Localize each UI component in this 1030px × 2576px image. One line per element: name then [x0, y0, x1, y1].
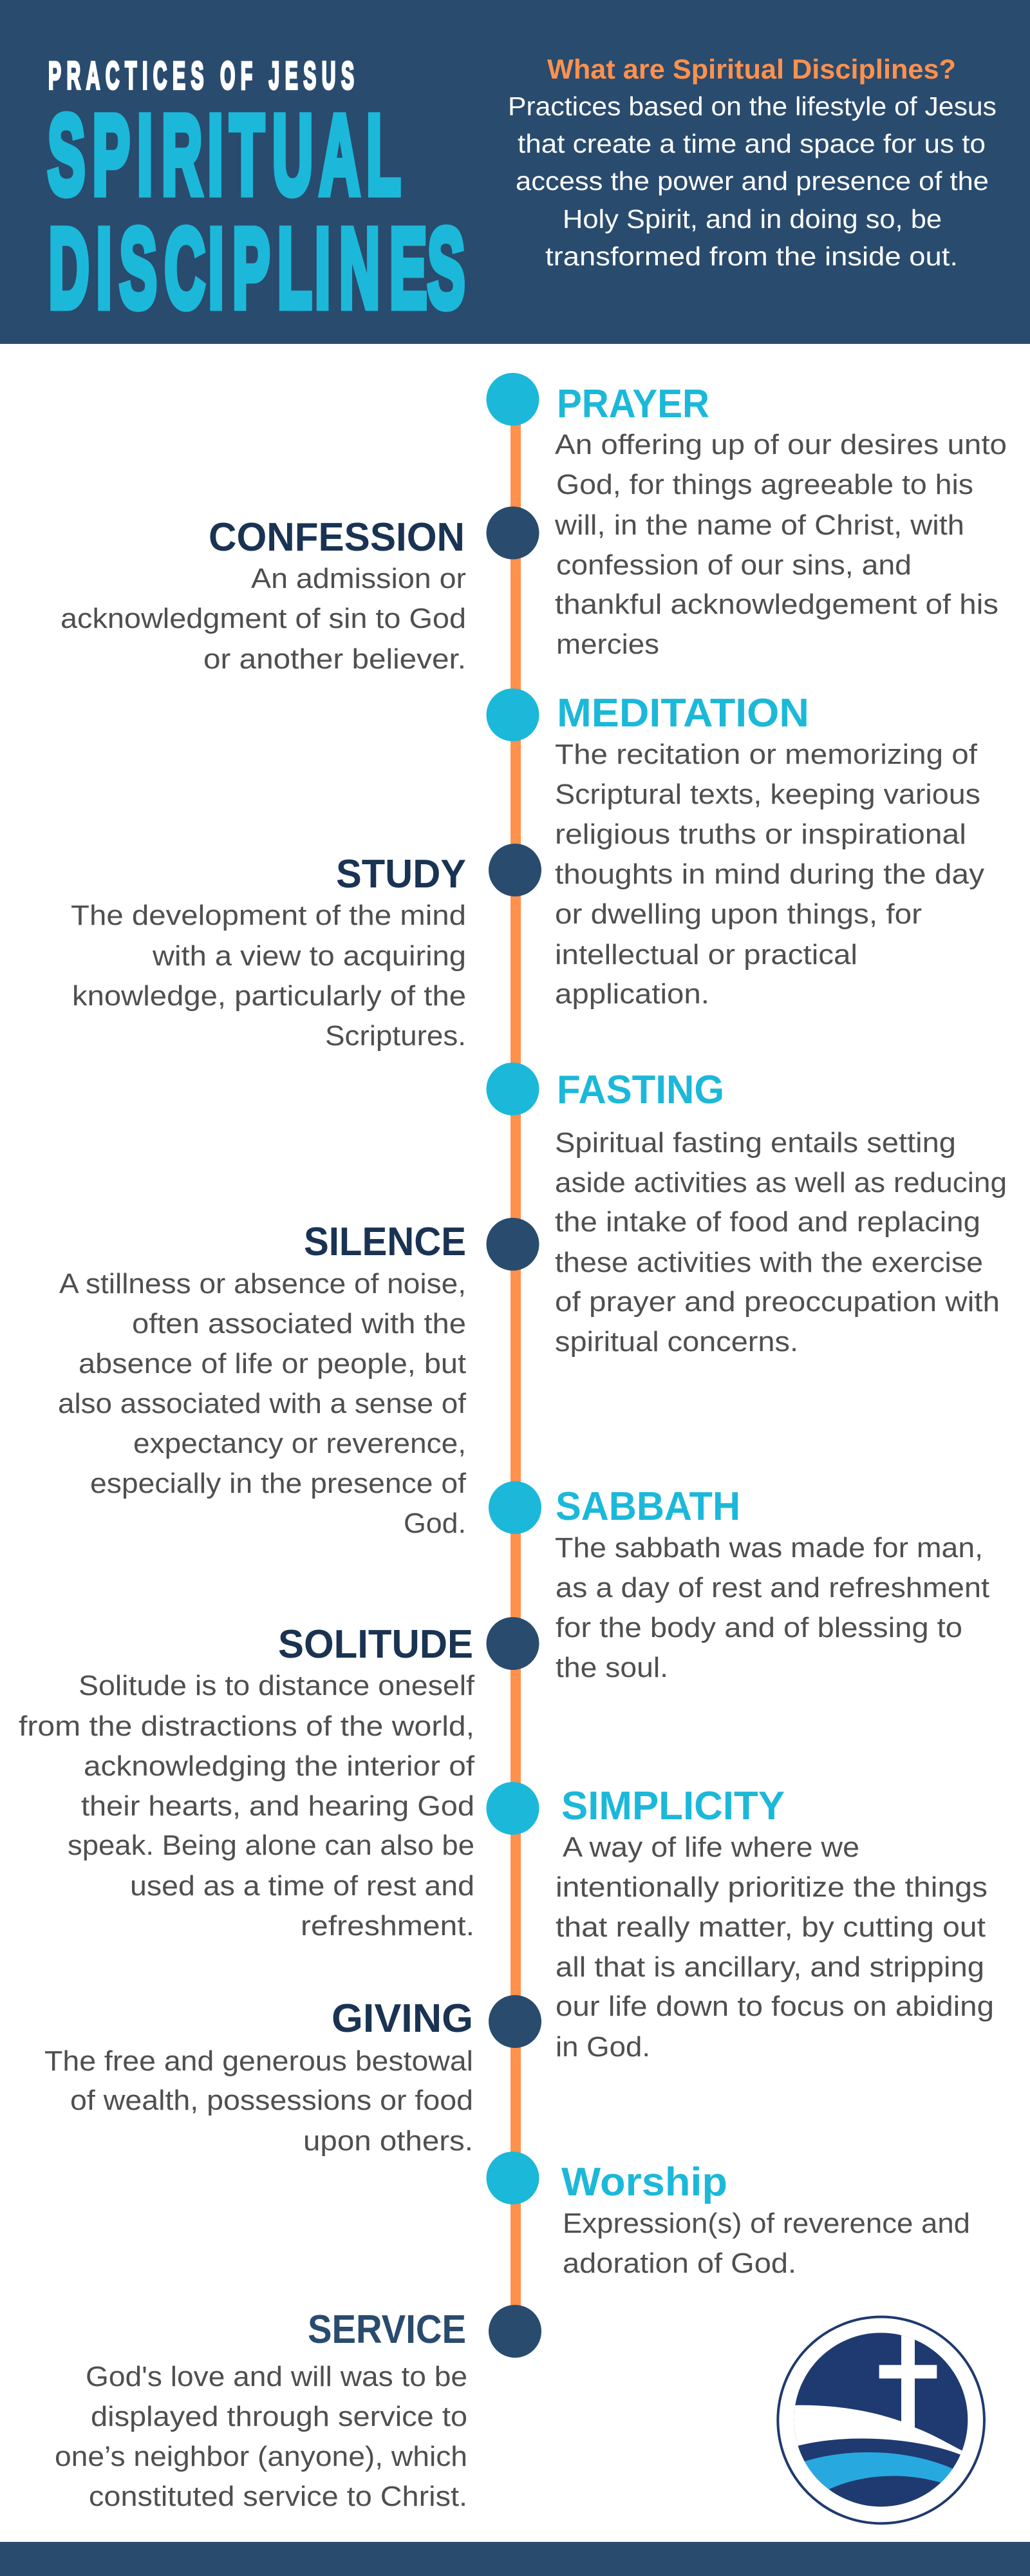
panel: solitude	[19, 1622, 475, 1942]
panel: silence	[58, 1220, 467, 1539]
panel: giving: of wealth, possessions or food	[70, 2085, 473, 2116]
panel: prayer: PRAYER	[557, 382, 709, 426]
panel: meditation: application.	[555, 978, 709, 1010]
panel: sabbath	[555, 1484, 989, 1683]
panel: giving: GIVING	[332, 1996, 473, 2041]
panel: simplicity: A way of life where we	[563, 1832, 859, 1863]
panel: fasting	[555, 1068, 1007, 1358]
panel: worship: Expression(s) of reverence and	[563, 2208, 970, 2239]
panel: confession: CONFESSION	[209, 515, 465, 560]
panel: fasting: the intake of food and replacing	[555, 1206, 980, 1238]
panel: solitude: acknowledging the interior of	[84, 1750, 475, 1782]
subtitle: practices of Jesus: PRACTICES OF JESUS	[48, 55, 354, 98]
intro definition text: that create a time and space for us to	[518, 129, 986, 158]
panel: service: displayed through service to	[91, 2401, 467, 2432]
panel: simplicity: SIMPLICITY	[561, 1784, 785, 1828]
panel: study: Scriptures.	[325, 1020, 466, 1052]
panel: prayer: confession of our sins, and	[556, 549, 912, 581]
timeline markers	[487, 373, 541, 2358]
panel: study: STUDY	[336, 852, 466, 896]
panel: silence: expectancy or reverence,	[133, 1428, 466, 1459]
panel: silence: often associated with the	[132, 1308, 466, 1340]
panel: service: SERVICE	[308, 2307, 466, 2352]
panel: sabbath: The sabbath was made for man,	[555, 1532, 983, 1564]
panel: meditation: The recitation or memorizing of	[555, 739, 978, 770]
panel: solitude: from the distractions of the world,	[19, 1710, 474, 1742]
panel: solitude: refreshment.	[301, 1910, 474, 1942]
panel: simplicity: in God.	[556, 2031, 650, 2063]
panel: meditation: intellectual or practical	[555, 939, 857, 971]
panel: fasting: aside activities as well as reducing	[555, 1167, 1007, 1198]
title line: spiritual: SPIRITUAL	[48, 93, 400, 218]
panel: sabbath: the soul.	[556, 1652, 668, 1683]
panel: silence: especially in the presence of	[90, 1468, 467, 1499]
panel: meditation	[555, 691, 984, 1010]
panel: meditation: thoughts in mind during the day	[555, 858, 984, 890]
panel: solitude: Solitude is to distance oneself	[79, 1670, 475, 1701]
panel: prayer: thankful acknowledgement of his	[555, 589, 998, 620]
panel: worship: adoration of God.	[563, 2248, 796, 2279]
intro definition text: Holy Spirit, and in doing so, be	[563, 204, 942, 234]
panel: solitude: speak. Being alone can also be	[68, 1830, 474, 1861]
panel: study: knowledge, particularly of the	[72, 980, 466, 1012]
timeline line	[510, 399, 521, 2331]
panel: study: The development of the mind	[71, 900, 466, 931]
panel: simplicity: all that is ancillary, and stripping	[556, 1951, 984, 1983]
title line: disciplines: DISCIPLINES	[49, 206, 465, 332]
panel: confession	[61, 515, 466, 675]
panel: sabbath: SABBATH	[556, 1484, 740, 1529]
panel: silence: absence of life or people, but	[79, 1348, 466, 1379]
panel: silence: also associated with a sense of	[58, 1388, 467, 1419]
panel: prayer: will, in the name of Christ, with	[554, 509, 964, 541]
panel: simplicity	[556, 1784, 994, 2063]
panel: confession: An admission or	[251, 563, 466, 594]
panel: fasting: these activities with the exercise	[555, 1247, 983, 1278]
panel: silence: God.	[404, 1508, 466, 1539]
intro definition text	[508, 91, 997, 271]
intro definition text: access the power and presence of the	[516, 166, 989, 196]
panel: sabbath: as a day of rest and refreshment	[556, 1572, 989, 1604]
panel: meditation: or dwelling upon things, for	[555, 898, 922, 930]
panel: giving: The free and generous bestowal	[44, 2045, 473, 2077]
intro question heading: What are Spiritual Disciplines?	[547, 54, 956, 85]
panel: header	[0, 0, 1030, 344]
panel: worship: Worship	[561, 2160, 727, 2204]
panel: service: constituted service to Christ.	[89, 2481, 467, 2512]
panel: service: one’s neighbor (anyone), which	[55, 2441, 467, 2472]
panel: giving: upon others.	[303, 2125, 473, 2157]
panel: study	[71, 852, 466, 1052]
panel: sabbath: for the body and of blessing to	[556, 1612, 962, 1643]
intro definition text: Practices based on the lifestyle of Jesus	[508, 91, 997, 121]
panel: solitude: their hearts, and hearing God	[81, 1790, 474, 1822]
panel: prayer: An offering up of our desires unto	[555, 429, 1007, 460]
panel: silence: SILENCE	[304, 1220, 466, 1264]
panel: simplicity: that really matter, by cutting out	[556, 1911, 986, 1943]
panel: prayer: God, for things agreeable to his	[556, 469, 973, 500]
panel: confession: acknowledgment of sin to God	[61, 603, 466, 634]
panel: meditation: religious truths or inspirational	[555, 819, 966, 850]
panel: meditation: MEDITATION	[557, 691, 809, 735]
panel: service: God's love and will was to be	[86, 2361, 467, 2392]
panel: fasting: of prayer and preoccupation with	[555, 1286, 1000, 1318]
icon: church logo with cross and waves	[778, 2317, 984, 2523]
panel: fasting: spiritual concerns.	[555, 1326, 798, 1358]
panel: prayer	[554, 382, 1007, 660]
panel: giving	[44, 1996, 473, 2157]
panel: solitude: used as a time of rest and	[130, 1870, 474, 1902]
panel: study: with a view to acquiring	[152, 940, 466, 972]
panel: silence: A stillness or absence of noise,	[59, 1268, 466, 1300]
panel: confession: or another believer.	[203, 643, 466, 675]
panel: worship	[561, 2160, 970, 2279]
intro definition text: transformed from the inside out.	[545, 242, 958, 271]
panel: simplicity: our life down to focus on abiding	[556, 1991, 994, 2022]
panel: solitude: SOLITUDE	[278, 1622, 473, 1667]
panel: service	[55, 2307, 467, 2512]
panel: fasting: Spiritual fasting entails setting	[555, 1127, 956, 1159]
panel: prayer: mercies	[556, 629, 659, 660]
footer bar	[0, 2542, 1030, 2576]
panel: meditation: Scriptural texts, keeping various	[555, 779, 980, 810]
panel: fasting: FASTING	[557, 1068, 724, 1112]
panel: simplicity: intentionally prioritize the things	[556, 1871, 988, 1903]
